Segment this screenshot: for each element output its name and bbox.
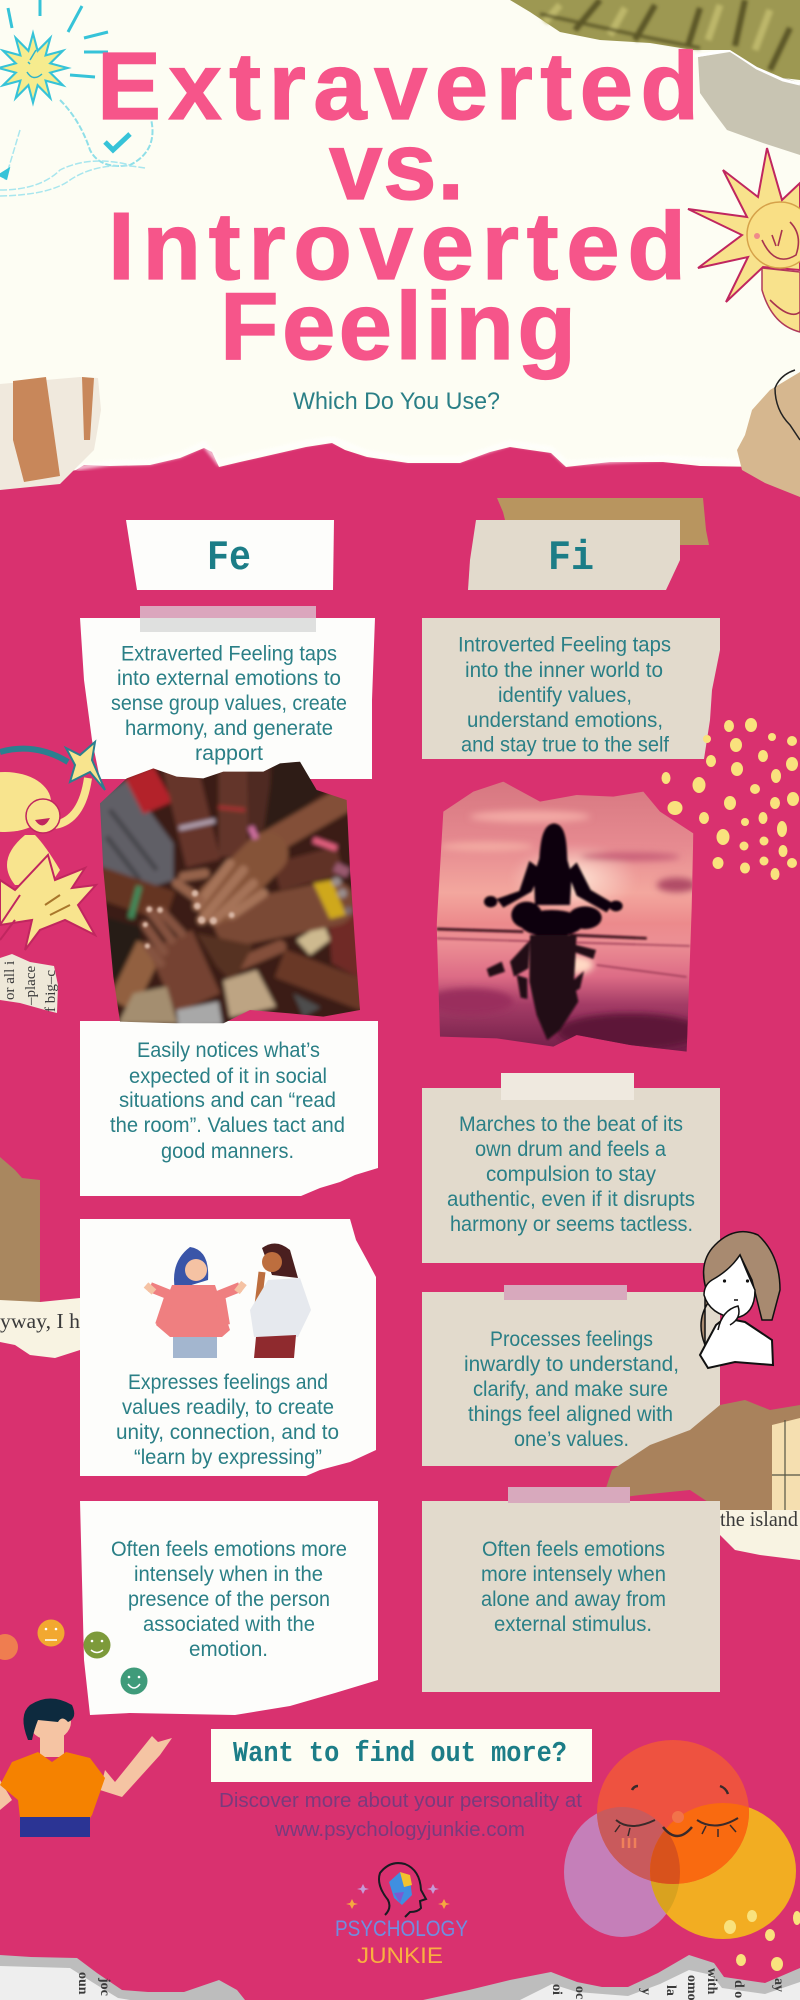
Fe card 3 text: values readily, to create	[122, 1395, 334, 1419]
Fi intro text: Introverted Feeling taps	[458, 632, 671, 656]
Fe card 2 text: Easily notices what’s	[137, 1038, 320, 1062]
panel: Fe card 2	[80, 1021, 378, 1196]
want to find out more banner: Want to find out more?	[233, 1737, 567, 1770]
Fi card 3 text	[464, 1327, 679, 1451]
Fe card 3 text: “learn by expressing”	[134, 1445, 322, 1469]
torn newspaper strip with text	[0, 1298, 81, 1358]
Fe card 2 text	[110, 1038, 345, 1163]
illustration: thinking girl	[700, 1232, 780, 1368]
Fi card 4 text: alone and away from	[481, 1587, 666, 1611]
left sun doodle	[0, 0, 152, 196]
torn newspaper strip, left: –place	[23, 966, 39, 1006]
subtitle: Which Do You Use?	[293, 388, 500, 415]
panel: Fi label: Fi	[548, 534, 594, 582]
call to action text	[219, 1790, 582, 1841]
Fi card 2 text: authentic, even if it disrupts	[447, 1187, 695, 1211]
Fe card 4 text	[111, 1537, 347, 1661]
tape	[504, 1285, 627, 1300]
panel: Fe card 3	[80, 1219, 376, 1476]
icon: emotion faces	[0, 1620, 148, 1694]
torn newspaper footer right: oc	[572, 1986, 587, 1999]
Fi card 2 text: harmony or seems tactless.	[450, 1212, 693, 1236]
Fi card 3 text: Processes feelings	[490, 1327, 653, 1351]
Fe card 4 text: emotion.	[189, 1637, 268, 1661]
Fe card 4 text: Often feels emotions more	[111, 1537, 347, 1561]
panel: Fe card 4	[80, 1501, 378, 1715]
call to action text: Discover more about your personality at	[219, 1790, 582, 1812]
Fi card 3 text: clarify, and make sure	[473, 1377, 668, 1401]
tape	[508, 1487, 630, 1503]
Fe intro text: Extraverted Feeling taps	[121, 642, 337, 666]
Fi card 2 text: Marches to the beat of its	[459, 1112, 683, 1136]
torn newspaper footer left	[0, 1955, 245, 2000]
torn newspaper footer right: omo	[684, 1975, 699, 2000]
Fi card 3 text: one’s values.	[514, 1427, 629, 1451]
torn newspaper footer right: with	[704, 1968, 719, 1995]
Fe card 4 text: associated with the	[143, 1612, 315, 1636]
cream header background	[0, 0, 800, 500]
Fe intro text	[111, 642, 347, 765]
yellow dots, lower right	[724, 1910, 800, 1971]
torn newspaper footer right: d o	[731, 1980, 746, 1998]
title: Feeling	[220, 273, 576, 380]
Fe card 2 text: expected of it in social	[129, 1064, 327, 1088]
Fe card 3 text: Expresses feelings and	[128, 1370, 328, 1394]
Fe card 3 text: unity, connection, and to	[116, 1420, 339, 1444]
kraft paper left edge	[0, 1157, 40, 1303]
title: Extraverted	[97, 33, 699, 140]
illustration: two women talking	[146, 1243, 311, 1358]
right sun doodle	[688, 148, 800, 332]
panel: Fe intro card	[80, 606, 375, 779]
Fe intro text: harmony, and generate	[125, 716, 333, 740]
title: vs.	[329, 113, 464, 220]
Fi intro text: understand emotions,	[467, 708, 663, 732]
illustration: overlapping smiling circles	[564, 1740, 796, 1939]
torn newspaper footer left: oun	[75, 1972, 90, 1995]
yellow dot pattern	[662, 718, 799, 880]
Fe card 2 text: the room”. Values tact and	[110, 1113, 345, 1137]
Fe card 4 text: intensely when in the	[134, 1562, 323, 1586]
Fi card 2 text	[447, 1112, 695, 1236]
Fi card 4 text: external stimulus.	[494, 1612, 652, 1636]
torn newspaper strip with text: yway, I h	[0, 1309, 81, 1333]
Fi card 2 text: compulsion to stay	[486, 1162, 656, 1186]
torn paper fringe	[76, 439, 765, 468]
panel: Fi label	[468, 520, 680, 590]
Fi intro text: identify values,	[498, 683, 632, 707]
photo: stacked hands	[100, 762, 360, 1024]
torn newspaper footer right	[423, 1955, 800, 2000]
illustration: man pointing	[0, 1698, 172, 1837]
left taped paper scrap	[0, 377, 101, 490]
title	[97, 33, 699, 380]
torn newspaper strip, left: or all i	[2, 961, 18, 1000]
panel: Fi intro card	[422, 618, 720, 759]
Fe card 2 text: good manners.	[161, 1139, 294, 1163]
logo: Psychology Junkie: PSYCHOLOGY	[335, 1916, 468, 1941]
torn newspaper footer right: la	[663, 1985, 678, 1996]
torn newspaper footer right: y	[638, 1988, 653, 1995]
call to action text: www.psychologyjunkie.com	[274, 1819, 525, 1841]
Fi card 3 text: inwardly to understand,	[464, 1352, 679, 1376]
panel: Fi card 3	[422, 1285, 720, 1466]
tan tape behind Fi label	[497, 498, 709, 545]
want to find out more banner	[211, 1729, 592, 1782]
teal swoosh, monkey and stars	[0, 742, 105, 950]
Fi card 4 text: Often feels emotions	[482, 1537, 665, 1561]
Fe card 3 text	[116, 1370, 339, 1469]
pink main background with torn top edge	[0, 443, 800, 2000]
photo: meditating silhouette at sunset	[436, 782, 694, 1052]
torn newspaper footer right: ay	[771, 1978, 786, 1992]
Fe intro text: sense group values, create	[111, 691, 347, 715]
Fi intro text: and stay true to the self	[461, 732, 669, 756]
kraft paper right: the island	[720, 1507, 798, 1531]
Fe intro text: into external emotions to	[117, 666, 341, 690]
kraft paper right	[602, 1400, 800, 1560]
Fi card 4 text: more intensely when	[481, 1562, 666, 1586]
torn newspaper strip, left	[0, 954, 59, 1013]
Fe card 2 text: situations and can “read	[119, 1088, 336, 1112]
Fi intro text	[458, 632, 671, 756]
panel: Fe label: Fe	[207, 534, 251, 582]
panel: Fi card 2	[422, 1073, 720, 1263]
title: Introverted	[108, 193, 686, 300]
Fi card 4 text	[481, 1537, 666, 1636]
tape	[140, 606, 316, 632]
right sketched paper scrap	[737, 370, 800, 497]
panel: Fi card 4	[422, 1487, 720, 1692]
Fi intro text: into the inner world to	[465, 658, 663, 682]
Fe intro text: rapport	[195, 741, 263, 765]
panel: Fe label	[126, 520, 334, 590]
torn newspaper footer left: joc	[97, 1977, 112, 1996]
olive paper top right	[510, 0, 800, 155]
tape	[501, 1073, 634, 1100]
torn newspaper footer right: oi	[549, 1984, 564, 1995]
Fi card 3 text: things feel aligned with	[468, 1402, 673, 1426]
Fe card 4 text: presence of the person	[128, 1587, 330, 1611]
torn newspaper strip, left: f big–c	[43, 970, 59, 1012]
logo: Psychology Junkie	[335, 1863, 468, 1968]
icon: head with puzzle brain	[346, 1863, 450, 1917]
Fi card 2 text: own drum and feels a	[475, 1137, 666, 1161]
logo: Psychology Junkie: JUNKIE	[357, 1943, 443, 1968]
